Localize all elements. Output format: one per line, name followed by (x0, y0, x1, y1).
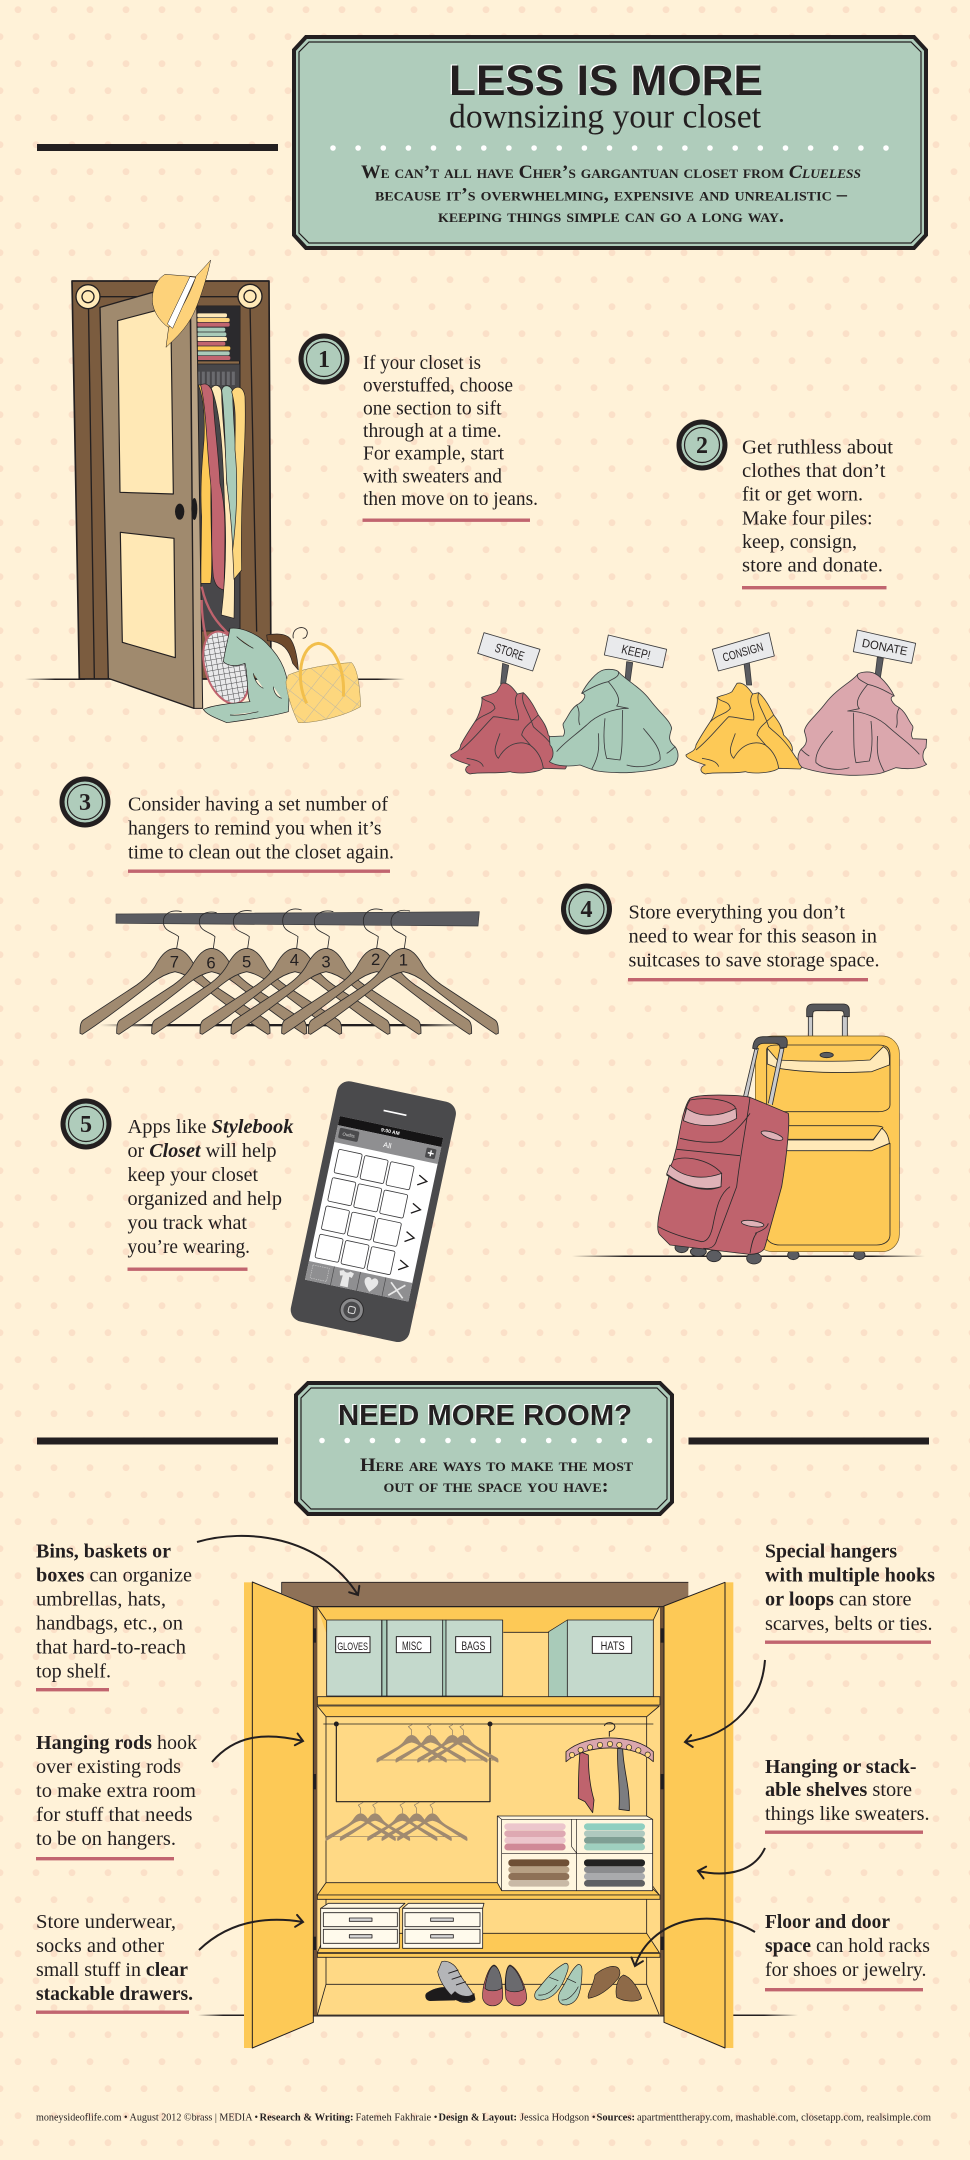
hanging rods (323, 1722, 653, 1802)
box: hats: HATS (601, 1639, 625, 1653)
number badge 5: 5 (80, 1112, 92, 1138)
box: misc (387, 1620, 446, 1696)
hanging clothes (198, 384, 245, 618)
step 5 text: keep your closet (128, 1164, 258, 1186)
footer credits (36, 2112, 931, 2124)
shelves and floors (317, 1697, 660, 2015)
multi-hook hanger with tie and scarf (566, 1723, 653, 1813)
illustration: smartphone app: 9:00 AM (380, 1127, 400, 1137)
divider bars: section two (37, 1438, 929, 1444)
dotted divider (319, 1438, 652, 1443)
floor line: closet door (25, 678, 405, 680)
floor lines: wardrobe (198, 2014, 798, 2016)
pile: donate: DONATE (861, 636, 909, 658)
tip: hanging rods: Hanging rods hook (36, 1732, 197, 1754)
step 2 text: Make four piles: (742, 507, 872, 529)
section intro: Here are ways to make the most (360, 1455, 633, 1476)
tip: hanging rods: to be on hangers. (36, 1828, 176, 1850)
pile: store: STORE (493, 641, 526, 663)
hanger numbers: 5 (242, 953, 251, 972)
footer credits: Jessica Hodgson • (520, 2112, 596, 2124)
tip: hanging rods: for stuff that needs (36, 1804, 193, 1826)
top compartment (317, 1607, 659, 1697)
step 5 text: Apps like Stylebook (128, 1116, 294, 1138)
illustration: organised wardrobe (244, 1582, 733, 2048)
number badge 3 (60, 776, 110, 828)
step 2 text: keep, consign, (742, 531, 857, 553)
step 2 text: clothes that don’t (742, 460, 886, 482)
step 3 text: time to clean out the closet again. (128, 842, 394, 864)
tip: bins: Bins, baskets or (36, 1540, 171, 1562)
illustration: smartphone app: Outfits (342, 1131, 355, 1139)
pile: consign (686, 633, 802, 774)
hanger numbers (170, 950, 408, 973)
step 2 (676, 420, 893, 589)
pile: donate (798, 630, 927, 775)
tip: special hangers: with multiple hooks (765, 1564, 935, 1586)
step 2 text (742, 436, 893, 576)
step 1 text (363, 352, 538, 510)
step 5 text: or Closet will help (128, 1140, 276, 1162)
app grid (315, 1149, 415, 1275)
tip: hanging rods: over existing rods (36, 1756, 181, 1778)
intro text: We can’t all have Cher’s gargantuan closet from Clueless (361, 162, 861, 183)
tip: shelves: able shelves store (765, 1779, 912, 1801)
tip: floor and door: space can hold racks (765, 1935, 930, 1957)
tip: drawers: small stuff in clear (36, 1959, 188, 1981)
tip: bins: handbags, etc., on (36, 1612, 183, 1634)
intro text: keeping things simple can go a long way. (438, 206, 784, 227)
home button (338, 1296, 366, 1324)
small hangers (326, 1724, 498, 1841)
number badge 3: 3 (79, 790, 91, 816)
tip: floor and door (765, 1911, 930, 1991)
yellow suitcase (755, 1004, 899, 1260)
illustration: smartphone app: All (383, 1140, 393, 1151)
step 1 text: overstuffed, choose (363, 375, 513, 397)
step 4 text: need to wear for this season in (628, 926, 877, 948)
box: hats (549, 1620, 653, 1697)
section heading: NEED MORE ROOM? (338, 1400, 632, 1432)
hanger numbers: 6 (206, 954, 216, 973)
footer credits: Research & Writing: (260, 2112, 354, 2124)
tip: drawers: Store underwear, (36, 1911, 176, 1933)
step 5 (60, 1098, 294, 1271)
tip: drawers: stackable drawers. (36, 1983, 193, 2005)
hanger numbers: 2 (371, 950, 380, 969)
hanger numbers: 4 (290, 951, 299, 970)
tip: floor and door: for shoes or jewelry. (765, 1959, 926, 1981)
flats (483, 1965, 527, 2006)
hanger numbers: 1 (399, 951, 408, 970)
arrows: wardrobe callouts (197, 1536, 765, 1966)
red suitcase (658, 1037, 789, 1264)
illustration: open closet door (72, 260, 361, 723)
number badge 5 (60, 1098, 112, 1150)
step 1 text: one section to sift (363, 397, 502, 419)
footer credits: Design & Layout: (438, 2112, 517, 2124)
step 1 text: with sweaters and (363, 465, 502, 487)
stackable sweater shelves (497, 1816, 659, 1895)
tip: special hangers (765, 1540, 935, 1644)
intro text (361, 162, 861, 227)
heel and hook (267, 628, 307, 670)
step 3 text: Consider having a set number of (128, 794, 388, 816)
tip: shelves: Hanging or stack- (765, 1756, 916, 1778)
box: gloves (327, 1620, 387, 1696)
tip: hanging rods (36, 1732, 197, 1860)
step 5 text: you track what (128, 1212, 247, 1234)
tennis racket (195, 587, 257, 710)
dotted divider (330, 145, 889, 151)
step 5 text: you’re wearing. (128, 1236, 250, 1258)
title banner (294, 37, 926, 248)
subheading: downsizing your closet (449, 98, 762, 136)
step 5 text (128, 1116, 294, 1258)
floor line: suitcases (572, 1256, 925, 1257)
number badge 4: 4 (580, 897, 592, 923)
sun hat (152, 260, 211, 347)
footer credits: Fatemeh Fakhraie • (356, 2112, 438, 2124)
heading: less is more: LESS IS MORE (449, 57, 763, 105)
pile: store (451, 633, 566, 774)
step 4 (561, 884, 880, 981)
step 2 text: fit or get worn. (742, 484, 863, 506)
number badge 1 (298, 334, 350, 384)
sneakers (426, 1961, 475, 2003)
shoes (426, 1961, 642, 2006)
box: gloves: GLOVES (337, 1641, 368, 1653)
step 3 text: hangers to remind you when it’s (128, 818, 382, 840)
tip: special hangers: scarves, belts or ties. (765, 1613, 932, 1635)
step 4 text (628, 902, 880, 972)
step 1 text: then move on to jeans. (363, 488, 538, 510)
box: misc: MISC (402, 1639, 422, 1653)
illustration: suitcases (658, 1004, 899, 1264)
footer credits: apartmenttherapy.com, mashable.com, closetapp.com, realsimple.com (637, 2112, 931, 2124)
step 1 text: If your closet is (363, 352, 481, 374)
number badge 2: 2 (696, 433, 708, 459)
illustration: smartphone app (288, 1079, 458, 1344)
tip: drawers: socks and other (36, 1935, 164, 1957)
tip: drawers (36, 1911, 193, 2014)
section intro (360, 1455, 633, 1497)
box: bags (446, 1620, 503, 1696)
pile: keep: KEEP! (620, 642, 652, 663)
section banner: need more room (296, 1383, 672, 1514)
tip: special hangers: or loops can store (765, 1588, 912, 1610)
footer credits: Sources: (596, 2112, 635, 2124)
rosettes (76, 284, 262, 309)
tip: bins: that hard-to-reach (36, 1636, 186, 1658)
mint fabric (203, 628, 289, 723)
tip: bins (36, 1540, 192, 1691)
step 1 (298, 334, 538, 522)
tab bar (305, 1261, 412, 1302)
hanger numbers: 7 (170, 953, 179, 972)
step 3 text (128, 794, 394, 864)
step 2 text: Get ruthless about (742, 436, 893, 458)
step 5 text: organized and help (128, 1188, 282, 1210)
pile: keep (549, 635, 678, 773)
step 4 text: suitcases to save storage space. (628, 950, 880, 972)
step 1 text: through at a time. (363, 420, 502, 442)
tip: hanging rods: to make extra room (36, 1780, 196, 1802)
left wardrobe door (244, 1582, 313, 2048)
illustration: four clothing piles with signs (451, 630, 927, 775)
section intro: out of the space you have: (384, 1476, 608, 1497)
number badge 4 (561, 884, 612, 934)
pile: consign: CONSIGN (721, 640, 765, 665)
tip: shelves (765, 1756, 930, 1834)
hinges (313, 1628, 664, 1950)
tip: floor and door: Floor and door (765, 1911, 890, 1933)
door (100, 282, 203, 708)
hanger numbers: 3 (321, 953, 331, 972)
sandals (588, 1966, 642, 2001)
tip: special hangers: Special hangers (765, 1540, 897, 1562)
tip: bins: umbrellas, hats, (36, 1588, 166, 1610)
box: bags: BAGS (461, 1639, 485, 1653)
folded clothes (197, 313, 230, 360)
tip: bins: boxes can organize (36, 1564, 192, 1586)
clear stackable drawers (321, 1903, 484, 1948)
purse (286, 643, 361, 723)
divider bar: header left (37, 144, 278, 151)
intro text: because it’s overwhelming, expensive and unrealistic – (375, 184, 848, 206)
tip: shelves: things like sweaters. (765, 1803, 930, 1825)
step 2 text: store and donate. (742, 554, 883, 576)
tip: bins: top shelf. (36, 1660, 111, 1682)
step 4 text: Store everything you don’t (628, 902, 845, 924)
illustration: hangers on rod (80, 909, 498, 1034)
step 1 text: For example, start (363, 443, 504, 465)
boat shoes (535, 1963, 582, 2005)
step 3 (60, 776, 394, 873)
number badge 1: 1 (318, 347, 330, 373)
footer credits: moneysideoflife.com • August 2012 ©brass | MEDIA • (36, 2112, 258, 2124)
number badge 2 (676, 420, 728, 470)
right wardrobe door (664, 1582, 733, 2048)
